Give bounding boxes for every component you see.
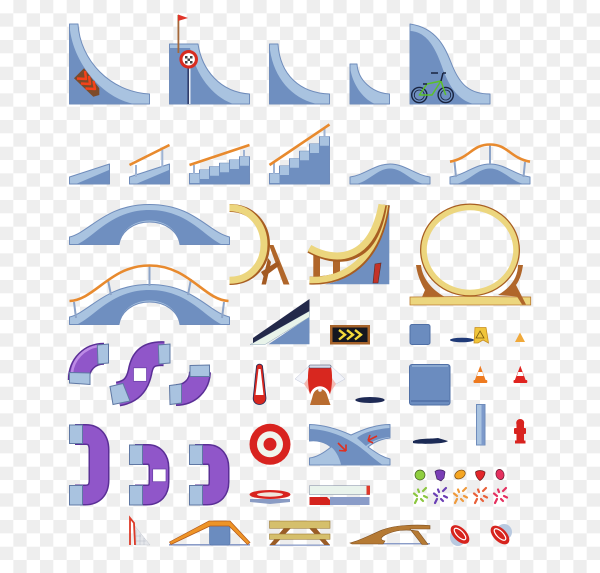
icon: chevron sign	[330, 325, 370, 344]
icon: launcher	[295, 365, 345, 405]
icon: small block	[410, 324, 430, 344]
icon: apple	[415, 470, 425, 480]
icon: puddle	[450, 338, 474, 342]
panel: wedges, stairs and humps row	[70, 124, 530, 184]
icon: springboard bar	[310, 486, 370, 505]
panel: quarter ramps row	[70, 14, 490, 104]
panel: wooden quarter pipe on blue wall	[310, 204, 389, 284]
panel: fruit splats	[414, 488, 507, 503]
panel: fruits	[415, 468, 505, 481]
icon: orange cone	[474, 366, 487, 383]
icon: crossing ramps	[310, 424, 390, 465]
icon: orange fruit	[453, 468, 467, 481]
icon: kicker with block	[169, 521, 250, 546]
icon: green splat	[414, 488, 427, 503]
icon: orange splat	[454, 488, 467, 503]
icon: raspberry	[495, 468, 505, 481]
icon: red cone	[514, 366, 527, 383]
panel: black grip ramp	[250, 299, 310, 344]
tall stairs with rail	[270, 124, 330, 184]
tall curved ramp with bike	[410, 24, 490, 104]
pipe: s-curve with gap	[110, 344, 170, 404]
icon: red button right	[487, 522, 513, 548]
icon: bicycle	[412, 73, 453, 103]
icon: tiny cone	[515, 332, 525, 342]
ramp with chevron decal	[70, 24, 150, 104]
icon: strawberry	[476, 470, 485, 480]
short stairs with rail	[190, 145, 250, 184]
icon: grapes	[435, 470, 445, 481]
small hump	[350, 164, 430, 184]
icon: column	[476, 404, 485, 445]
pipe: short c-bend with gap	[130, 445, 166, 505]
icon: red button left	[447, 522, 473, 547]
arched bridge with rail	[70, 266, 230, 324]
icon: fire hydrant	[514, 419, 526, 444]
icon: manhole	[355, 397, 385, 403]
icon: red splat	[474, 488, 487, 503]
icon: dark crack puddle	[413, 438, 448, 444]
arched bridge	[70, 204, 230, 244]
icon: pink splat	[494, 488, 507, 503]
pipe: quarter bend	[70, 344, 108, 384]
icon: purple splat	[434, 488, 447, 503]
icon: goal net	[130, 518, 150, 545]
wedge with rail	[130, 145, 170, 184]
icon: wooden branch ramp	[350, 525, 430, 544]
icon: red skateboard	[373, 263, 381, 283]
pipe: long c-bend	[70, 425, 99, 505]
small wedge	[70, 164, 110, 184]
icon: big stone block	[410, 364, 450, 405]
pipe: short bend	[170, 365, 210, 404]
panel: bridges	[70, 204, 230, 324]
small hump with rail	[450, 144, 530, 184]
icon: target	[250, 424, 290, 465]
icon: pinball flipper	[253, 364, 266, 404]
panel: purple pipes	[70, 344, 219, 505]
icon: trampoline	[250, 490, 290, 504]
plain quarter ramp	[270, 44, 330, 104]
panel: wooden loop	[410, 206, 531, 305]
panel: wooden half pipe	[230, 208, 290, 284]
ramp with flag and checkered sign	[170, 14, 250, 104]
icon: picnic table	[270, 521, 330, 546]
icon: wet floor sign	[474, 328, 488, 343]
pipe: short c-bend	[190, 445, 219, 505]
small quarter ramp	[350, 64, 390, 104]
